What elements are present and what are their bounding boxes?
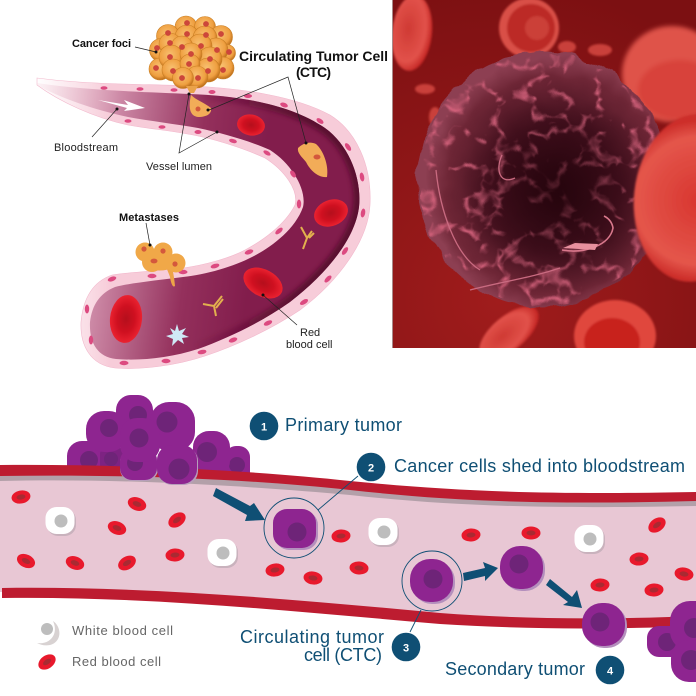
- badge 2: 2: [368, 462, 374, 474]
- label: metastases: Metastases: [119, 212, 179, 224]
- panel: metastasis diagram: [0, 395, 696, 684]
- shed cancer cell in circle: [264, 498, 324, 558]
- badge 2: [357, 453, 385, 481]
- white star cell: [166, 324, 189, 346]
- badge 1: [250, 412, 278, 440]
- primary tumor front cells: [120, 402, 198, 485]
- badge 3: [392, 633, 420, 661]
- red cell bottom left: [478, 306, 540, 348]
- blurred distant cells: [415, 41, 612, 127]
- label: cancer foci: Cancer foci: [72, 38, 131, 50]
- red cell top: [499, 0, 559, 58]
- photo left edge: [392, 0, 393, 348]
- bloodstream arrow: [98, 100, 145, 111]
- red blood cell 4: [108, 293, 144, 345]
- CTC leaving tumor: [190, 95, 211, 117]
- extravasating tumor cell: [582, 603, 627, 648]
- badge 3: 3: [403, 642, 409, 654]
- panel: micrograph of tumor cell among red blood cells: [388, 0, 696, 372]
- red blood cell 2: [310, 194, 352, 232]
- vessel lumen: [0, 474, 696, 624]
- label: circulating tumor cell: Circulating Tumor Cell: [239, 48, 388, 64]
- metastases cluster: [136, 242, 186, 287]
- leader dots: [116, 50, 308, 296]
- legend: red blood cell: Red blood cell: [72, 654, 161, 669]
- heading: cancer cells shed: Cancer cells shed into bloodstream: [394, 456, 685, 476]
- heading: circulating tumor cell: Circulating tumor: [240, 627, 384, 647]
- lumen edge shading: [206, 95, 360, 346]
- badge 4: [596, 656, 624, 684]
- heading: circulating tumor cell: cell (CTC): [304, 645, 382, 665]
- vessel wall: [37, 78, 370, 368]
- label: red blood cell: blood cell: [286, 339, 332, 351]
- legend: white blood cell: [37, 621, 173, 645]
- label: red blood cell: Red: [300, 327, 320, 339]
- cancer foci cluster: [149, 16, 236, 93]
- arrow: drift: [463, 562, 498, 581]
- heading: secondary tumor: Secondary tumor: [445, 659, 585, 679]
- red blood cell 1: [235, 112, 267, 138]
- heading: primary tumor: Primary tumor: [285, 415, 402, 435]
- red cell top left: [393, 0, 434, 72]
- legend: red blood cell: [35, 651, 161, 673]
- vessel upper gray edge: [0, 474, 696, 507]
- vessel lower wall: [2, 588, 696, 628]
- wall cell nuclei: [85, 86, 366, 365]
- badge 4: 4: [607, 666, 614, 678]
- photo background: [392, 0, 696, 348]
- red blood cell 3: [238, 261, 288, 305]
- circulating tumor cell in circle: [402, 551, 462, 611]
- red cell top right: [622, 26, 696, 122]
- label: CTC: (CTC): [296, 64, 331, 80]
- label: vessel lumen: Vessel lumen: [146, 161, 212, 173]
- panel: vessel illustration: [37, 16, 388, 368]
- legend: white blood cell: White blood cell: [72, 623, 173, 638]
- leader lines: [92, 47, 306, 325]
- label: bloodstream: Bloodstream: [54, 142, 118, 154]
- badge 1: 1: [261, 422, 267, 434]
- connector lines: [318, 476, 421, 632]
- large red cell right: [632, 114, 696, 283]
- vessel lumen: [37, 83, 359, 360]
- arrow: to secondary: [546, 579, 582, 608]
- primary tumor back cells: [67, 395, 250, 486]
- secondary tumor cells: [647, 601, 696, 682]
- arrow: shedding: [213, 488, 265, 521]
- tumor cell: [417, 53, 669, 307]
- drifting tumor cell: [500, 546, 545, 591]
- CTC in vessel: [298, 143, 327, 177]
- red blood cells: [11, 489, 694, 597]
- white blood cells: [46, 507, 605, 568]
- vessel upper wall: [0, 465, 696, 503]
- antibody icon 1: [301, 227, 314, 249]
- red cell bottom: [572, 298, 658, 348]
- antibody icon 2: [203, 296, 223, 316]
